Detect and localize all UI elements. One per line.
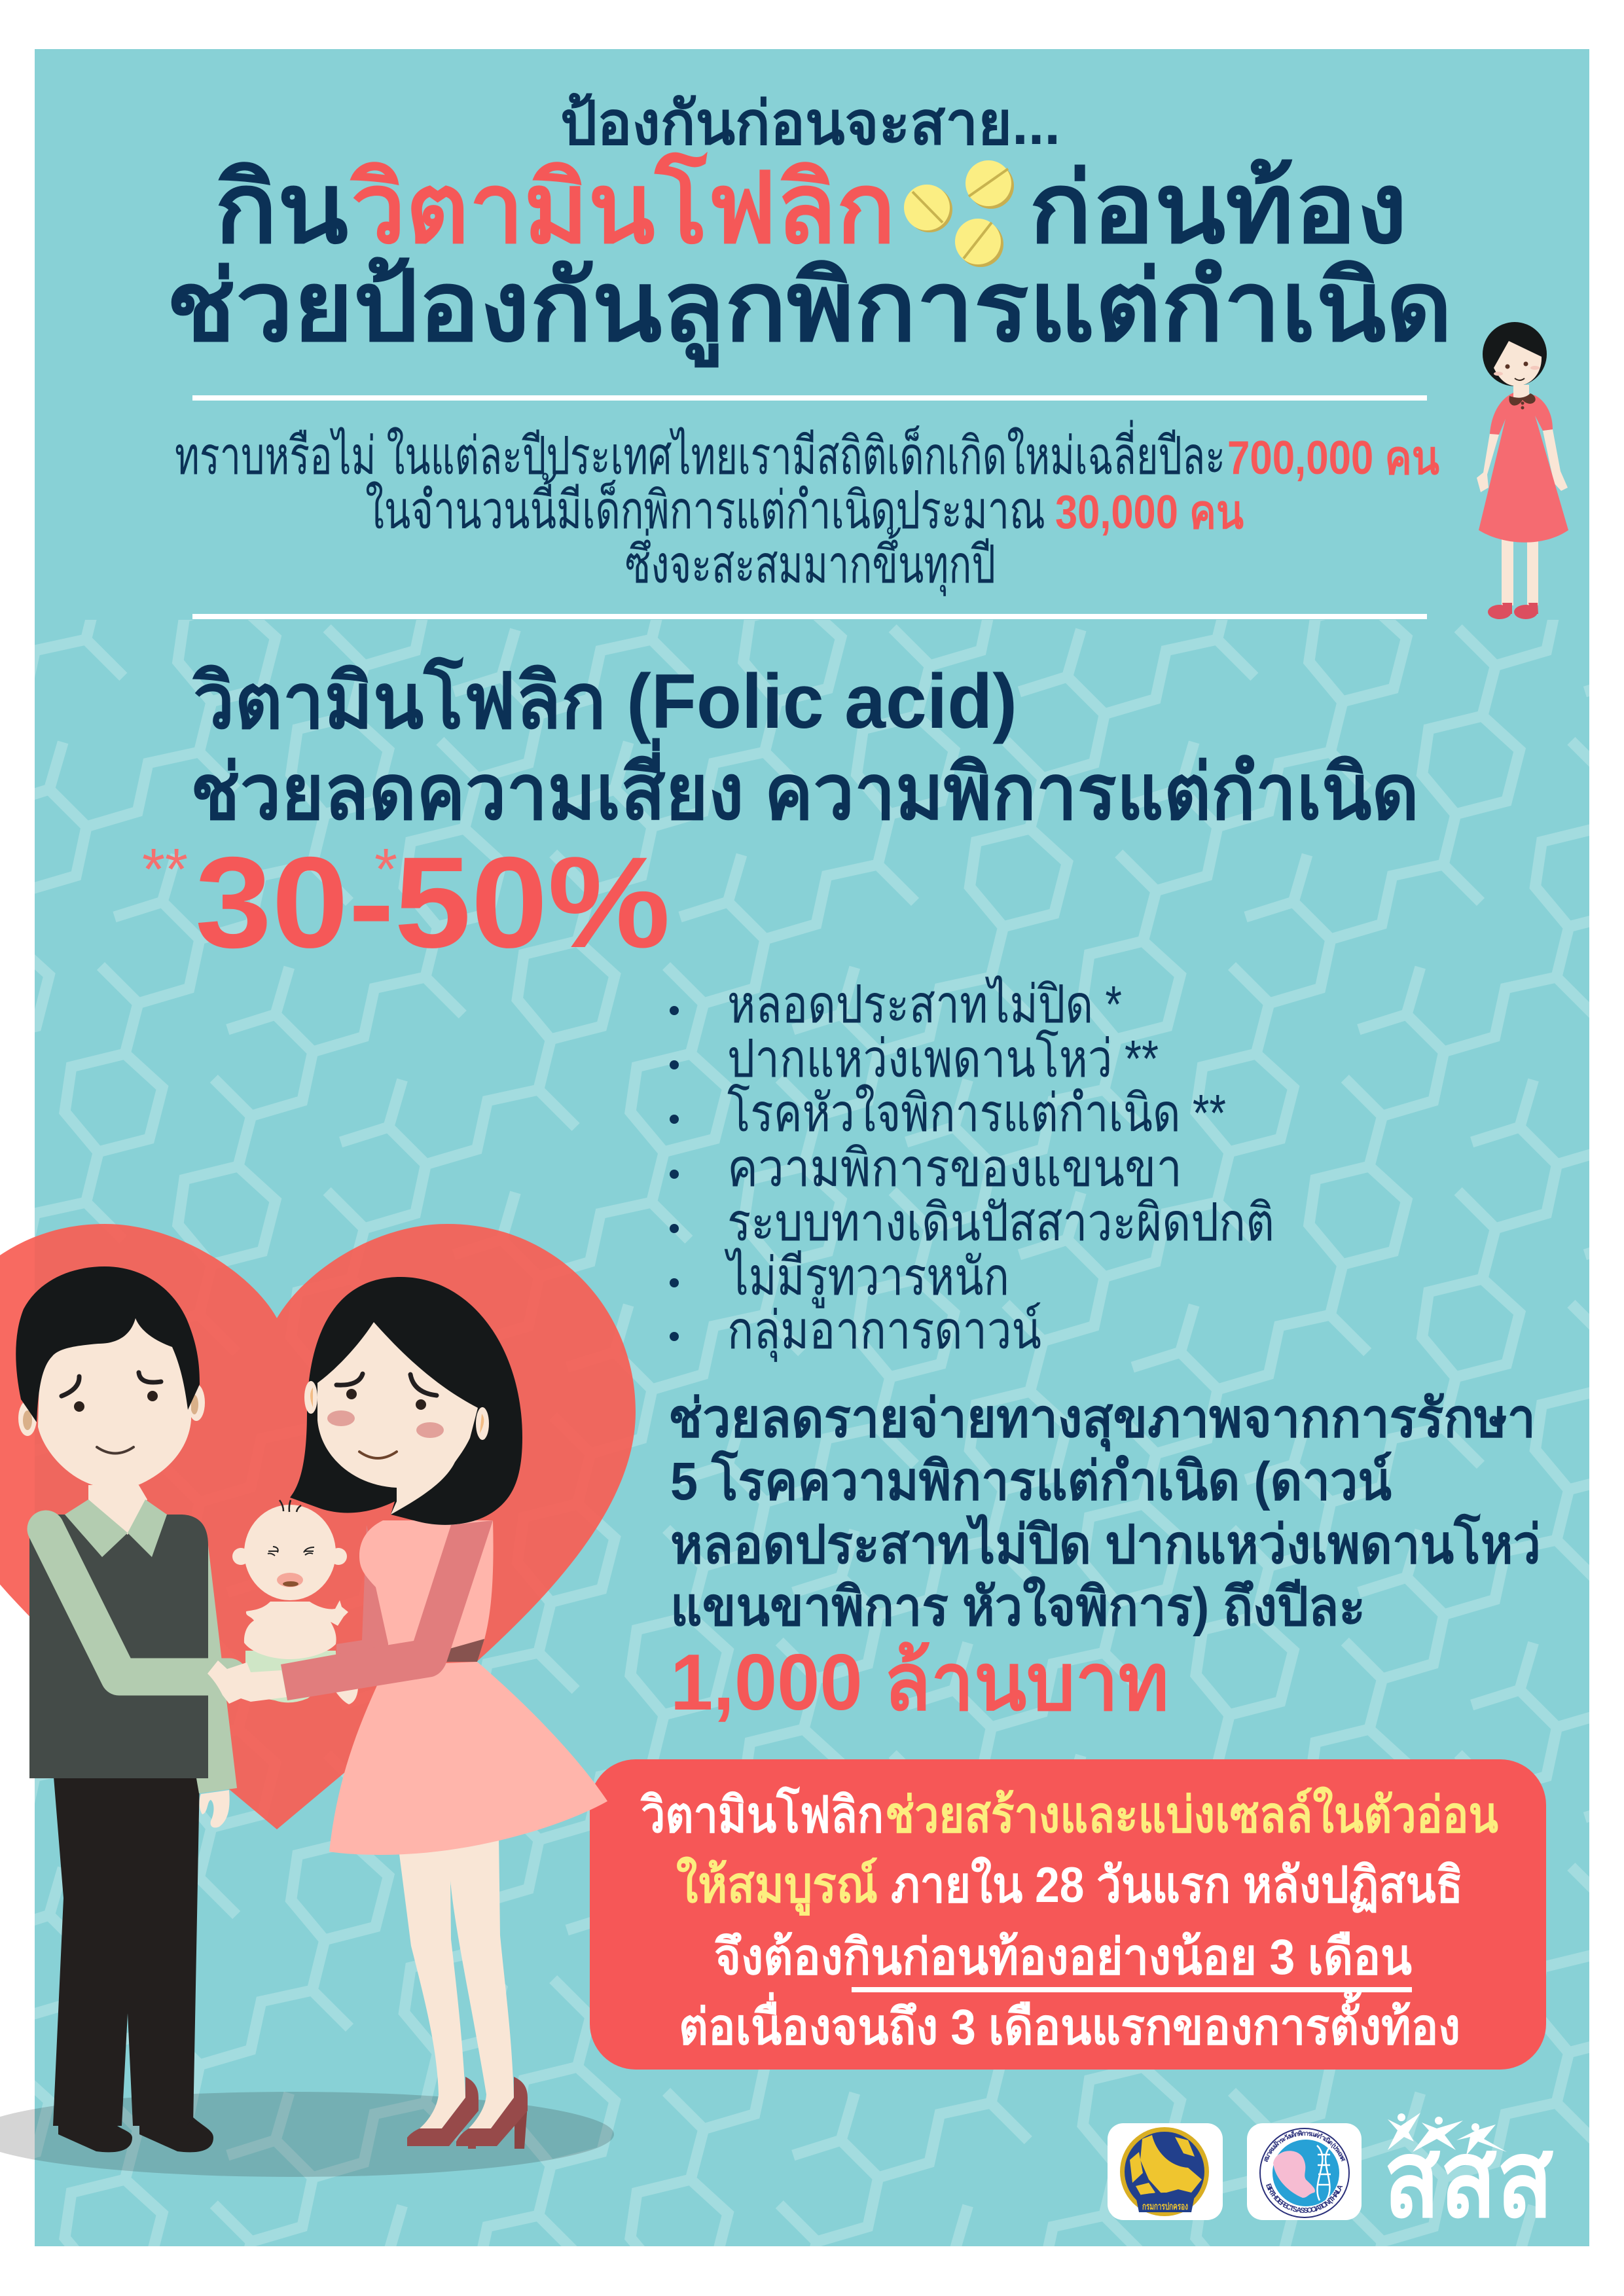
title: vitamin folic highlight: วิตามินโฟลิก	[350, 151, 895, 263]
woman front sleeve	[281, 1520, 493, 1700]
logo caption: association Thai name: สมาคมเฝ้าระวังเด็กพิการแต่กำเนิด (ประเทศไทย)	[1264, 2130, 1346, 2162]
list item: หลอดประสาทไม่ปิด *	[727, 975, 1122, 1033]
footnote marks: double star: **	[142, 837, 188, 903]
list item: ความพิการของแขนขา	[727, 1139, 1182, 1197]
floor shadow	[0, 2092, 614, 2177]
stat: 30,000 birth defects: 30,000 คน	[1055, 486, 1244, 539]
callout line one yellow: ช่วยสร้างและแบ่งเซลล์ในตัวอ่อน	[885, 1786, 1498, 1843]
callout: red box	[590, 1759, 1546, 2070]
cost line four: แขนขาพิการ หัวใจพิการ) ถึงปีละ	[670, 1576, 1365, 1637]
list item: กลุ่มอาการดาวน์	[727, 1301, 1041, 1362]
list item: โรคหัวใจพิการแต่กำเนิด **	[727, 1083, 1226, 1142]
stat: 1,000 million baht: 1,000 ล้านบาท	[670, 1638, 1169, 1727]
list of birth defects	[670, 975, 1274, 1362]
callout line three: จึงต้องกินก่อนท้องอย่างน้อย 3 เดือน	[714, 1929, 1412, 1985]
cost paragraph	[668, 1389, 1541, 1727]
title block	[166, 90, 1453, 368]
cost line three: หลอดประสาทไม่ปิด ปากแหว่งเพดานโหว่	[670, 1514, 1541, 1575]
big stat: 30-50 percent: 30-50%	[195, 830, 670, 975]
intro line one: ทราบหรือไม่ ในแต่ละปีประเทศไทยเรามีสถิติเด็กเกิดใหม่เฉลี่ยปีละ	[175, 420, 1225, 485]
stat: 700,000 births: 700,000 คน	[1227, 432, 1439, 484]
list item: ไม่มีรูทวารหนัก	[724, 1247, 1009, 1308]
title: kicker line: ป้องกันก่อนจะสาย...	[560, 90, 1060, 157]
logo caption: department name: กรมการปกครอง	[1142, 2201, 1188, 2212]
list item: ปากแหว่งเพดานโหว่ **	[727, 1029, 1159, 1088]
baby figure	[208, 1500, 358, 1704]
cost line two: 5 โรคความพิการแต่กำเนิด (ดาวน์	[670, 1450, 1392, 1511]
title: line one start: กิน	[215, 153, 348, 263]
illustration: small girl in red dress	[1477, 322, 1568, 619]
logo: department of provincial administration	[1108, 2123, 1223, 2220]
logo wordmark: สสส	[1384, 2119, 1553, 2239]
intro line three: ซึ่งจะสะสมมากขึ้นทุกปี	[625, 527, 996, 596]
woman figure	[290, 1277, 607, 2149]
illustration: family with heart	[0, 1224, 636, 2177]
title: line one end: ก่อนท้อง	[1029, 153, 1407, 263]
intro line two: ในจำนวนนี้มีเด็กพิการแต่กำเนิดประมาณ	[365, 473, 1045, 539]
logo: ThaiHealth	[1384, 2113, 1553, 2239]
callout line one white: วิตามินโฟลิก	[640, 1785, 884, 1843]
man figure	[16, 1266, 237, 2152]
callout line two yellow: ให้สมบูรณ์	[676, 1856, 878, 1916]
heading: folic acid: วิตามินโฟลิก (Folic acid)	[192, 656, 1017, 745]
cost line one: ช่วยลดรายจ่ายทางสุขภาพจากการรักษา	[668, 1389, 1536, 1452]
icon: folic acid pills	[904, 160, 1014, 267]
list item: ระบบทางเดินปัสสาวะผิดปกติ	[727, 1193, 1274, 1251]
title: line two: ช่วยป้องกันลูกพิการแต่กำเนิด	[166, 251, 1453, 368]
heading: reduces birth defect risk: ช่วยลดความเสี่ยง ความพิการแต่กำเนิด	[190, 738, 1419, 836]
callout line four: ต่อเนื่องจนถึง 3 เดือนแรกของการตั้งท้อง	[679, 1990, 1460, 2055]
logo caption: association name: BIRTH DEFECTS ASSOCIATION (THAILAND)	[1266, 2183, 1343, 2213]
intro paragraph	[175, 420, 1439, 596]
callout line two white: ภายใน 28 วันแรก หลังปฏิสนธิ	[891, 1856, 1463, 1913]
heart	[0, 1224, 636, 1829]
footnote marks: single star: *	[374, 837, 397, 903]
